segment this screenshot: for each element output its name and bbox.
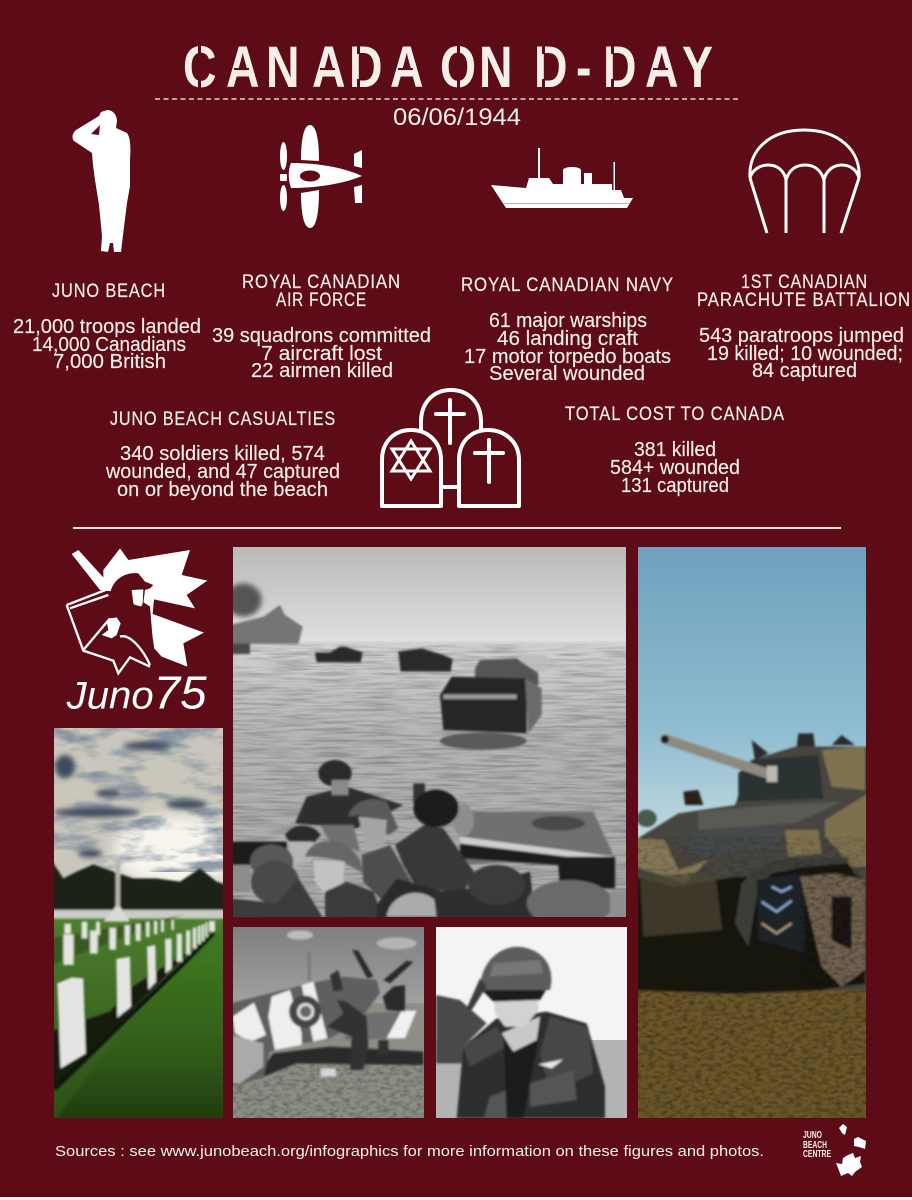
logo: Juno75: Juno75 bbox=[66, 666, 208, 718]
panel: Royal Canadian Navy: ROYAL CANADIAN NAVY bbox=[461, 275, 674, 296]
panel: total cost to Canada: TOTAL COST TO CANADA bbox=[565, 404, 785, 425]
panel: Royal Canadian Navy: Several wounded bbox=[489, 363, 645, 385]
panel: Juno Beach: 7,000 British bbox=[53, 351, 166, 373]
logo: Juno Beach Centre: BEACH bbox=[803, 1139, 827, 1151]
panel: Royal Canadian Air Force: 22 airmen killed bbox=[251, 360, 393, 382]
panel: Royal Canadian Air Force: AIR FORCE bbox=[276, 290, 367, 311]
logo: Juno75 bbox=[66, 548, 208, 718]
soldiers bbox=[295, 787, 403, 828]
panel: 1st Canadian Parachute Battalion: 19 killed; 10 wounded; bbox=[707, 343, 903, 365]
panel: Juno Beach casualties: JUNO BEACH CASUALTIES bbox=[110, 409, 336, 430]
photo: war cemetery bbox=[54, 728, 223, 1118]
panel: Juno Beach casualties: on or beyond the beach bbox=[117, 479, 328, 501]
panel: 1st Canadian Parachute Battalion: 543 paratroops jumped bbox=[699, 325, 904, 347]
panel: Juno Beach: 21,000 troops landed bbox=[13, 316, 201, 338]
logo: Juno Beach Centre: JUNO bbox=[803, 1129, 822, 1141]
panel: total cost to Canada: 584+ wounded bbox=[610, 457, 740, 479]
panel: Juno Beach casualties: 340 soldiers killed, 574 bbox=[120, 443, 325, 465]
icon: gravestones bbox=[382, 390, 519, 506]
panel: total cost to Canada bbox=[565, 404, 785, 497]
icon: warship bbox=[491, 148, 633, 208]
panel: Juno Beach: 14,000 Canadians bbox=[32, 334, 186, 356]
logo: Juno Beach Centre: CENTRE bbox=[803, 1148, 831, 1160]
panel: Juno Beach bbox=[13, 281, 201, 373]
icon: parachute bbox=[750, 130, 859, 233]
footer sources: Sources : see www.junobeach.org/infographics for more information on these figures and photos. bbox=[55, 1143, 764, 1160]
panel: Royal Canadian Air Force: ROYAL CANADIAN bbox=[242, 272, 401, 293]
panel: Royal Canadian Air Force: 39 squadrons committed bbox=[212, 325, 431, 347]
photo: Spitfire with invasion stripes bbox=[233, 927, 424, 1118]
panel: Royal Canadian Air Force: 7 aircraft lost bbox=[261, 343, 382, 365]
title: CANADA ON D-DAY bbox=[183, 35, 713, 100]
logo: Juno Beach Centre bbox=[803, 1124, 866, 1176]
panel: Royal Canadian Navy: 17 motor torpedo boats bbox=[464, 346, 671, 368]
photo: landing craft heading to Juno Beach bbox=[225, 545, 630, 927]
photo: Canadian paratrooper portrait bbox=[433, 927, 630, 1123]
panel: Royal Canadian Navy: 61 major warships bbox=[489, 310, 647, 332]
bottom edge strip bbox=[0, 1197, 912, 1200]
panel: total cost to Canada: 381 killed bbox=[634, 439, 716, 461]
panel: Royal Canadian Navy: 46 landing craft bbox=[497, 328, 638, 350]
icon: saluting soldier bbox=[73, 110, 130, 252]
panel: 1st Canadian Parachute Battalion: 84 captured bbox=[752, 360, 857, 382]
panel: 1st Canadian Parachute Battalion: 1ST CANADIAN bbox=[741, 272, 868, 293]
panel: 1st Canadian Parachute Battalion bbox=[697, 272, 911, 382]
panel: Royal Canadian Navy bbox=[461, 275, 674, 385]
panel: Juno Beach: JUNO BEACH bbox=[52, 281, 166, 302]
icon: airplane bbox=[280, 125, 362, 228]
panel: total cost to Canada: 131 captured bbox=[621, 475, 729, 497]
date: 06/06/1944 bbox=[393, 104, 521, 131]
photo: Sherman tank bbox=[635, 547, 868, 1120]
panel: Juno Beach casualties bbox=[105, 409, 340, 501]
panel: Juno Beach casualties: wounded, and 47 captured bbox=[105, 461, 340, 483]
panel: Royal Canadian Air Force bbox=[212, 272, 431, 382]
